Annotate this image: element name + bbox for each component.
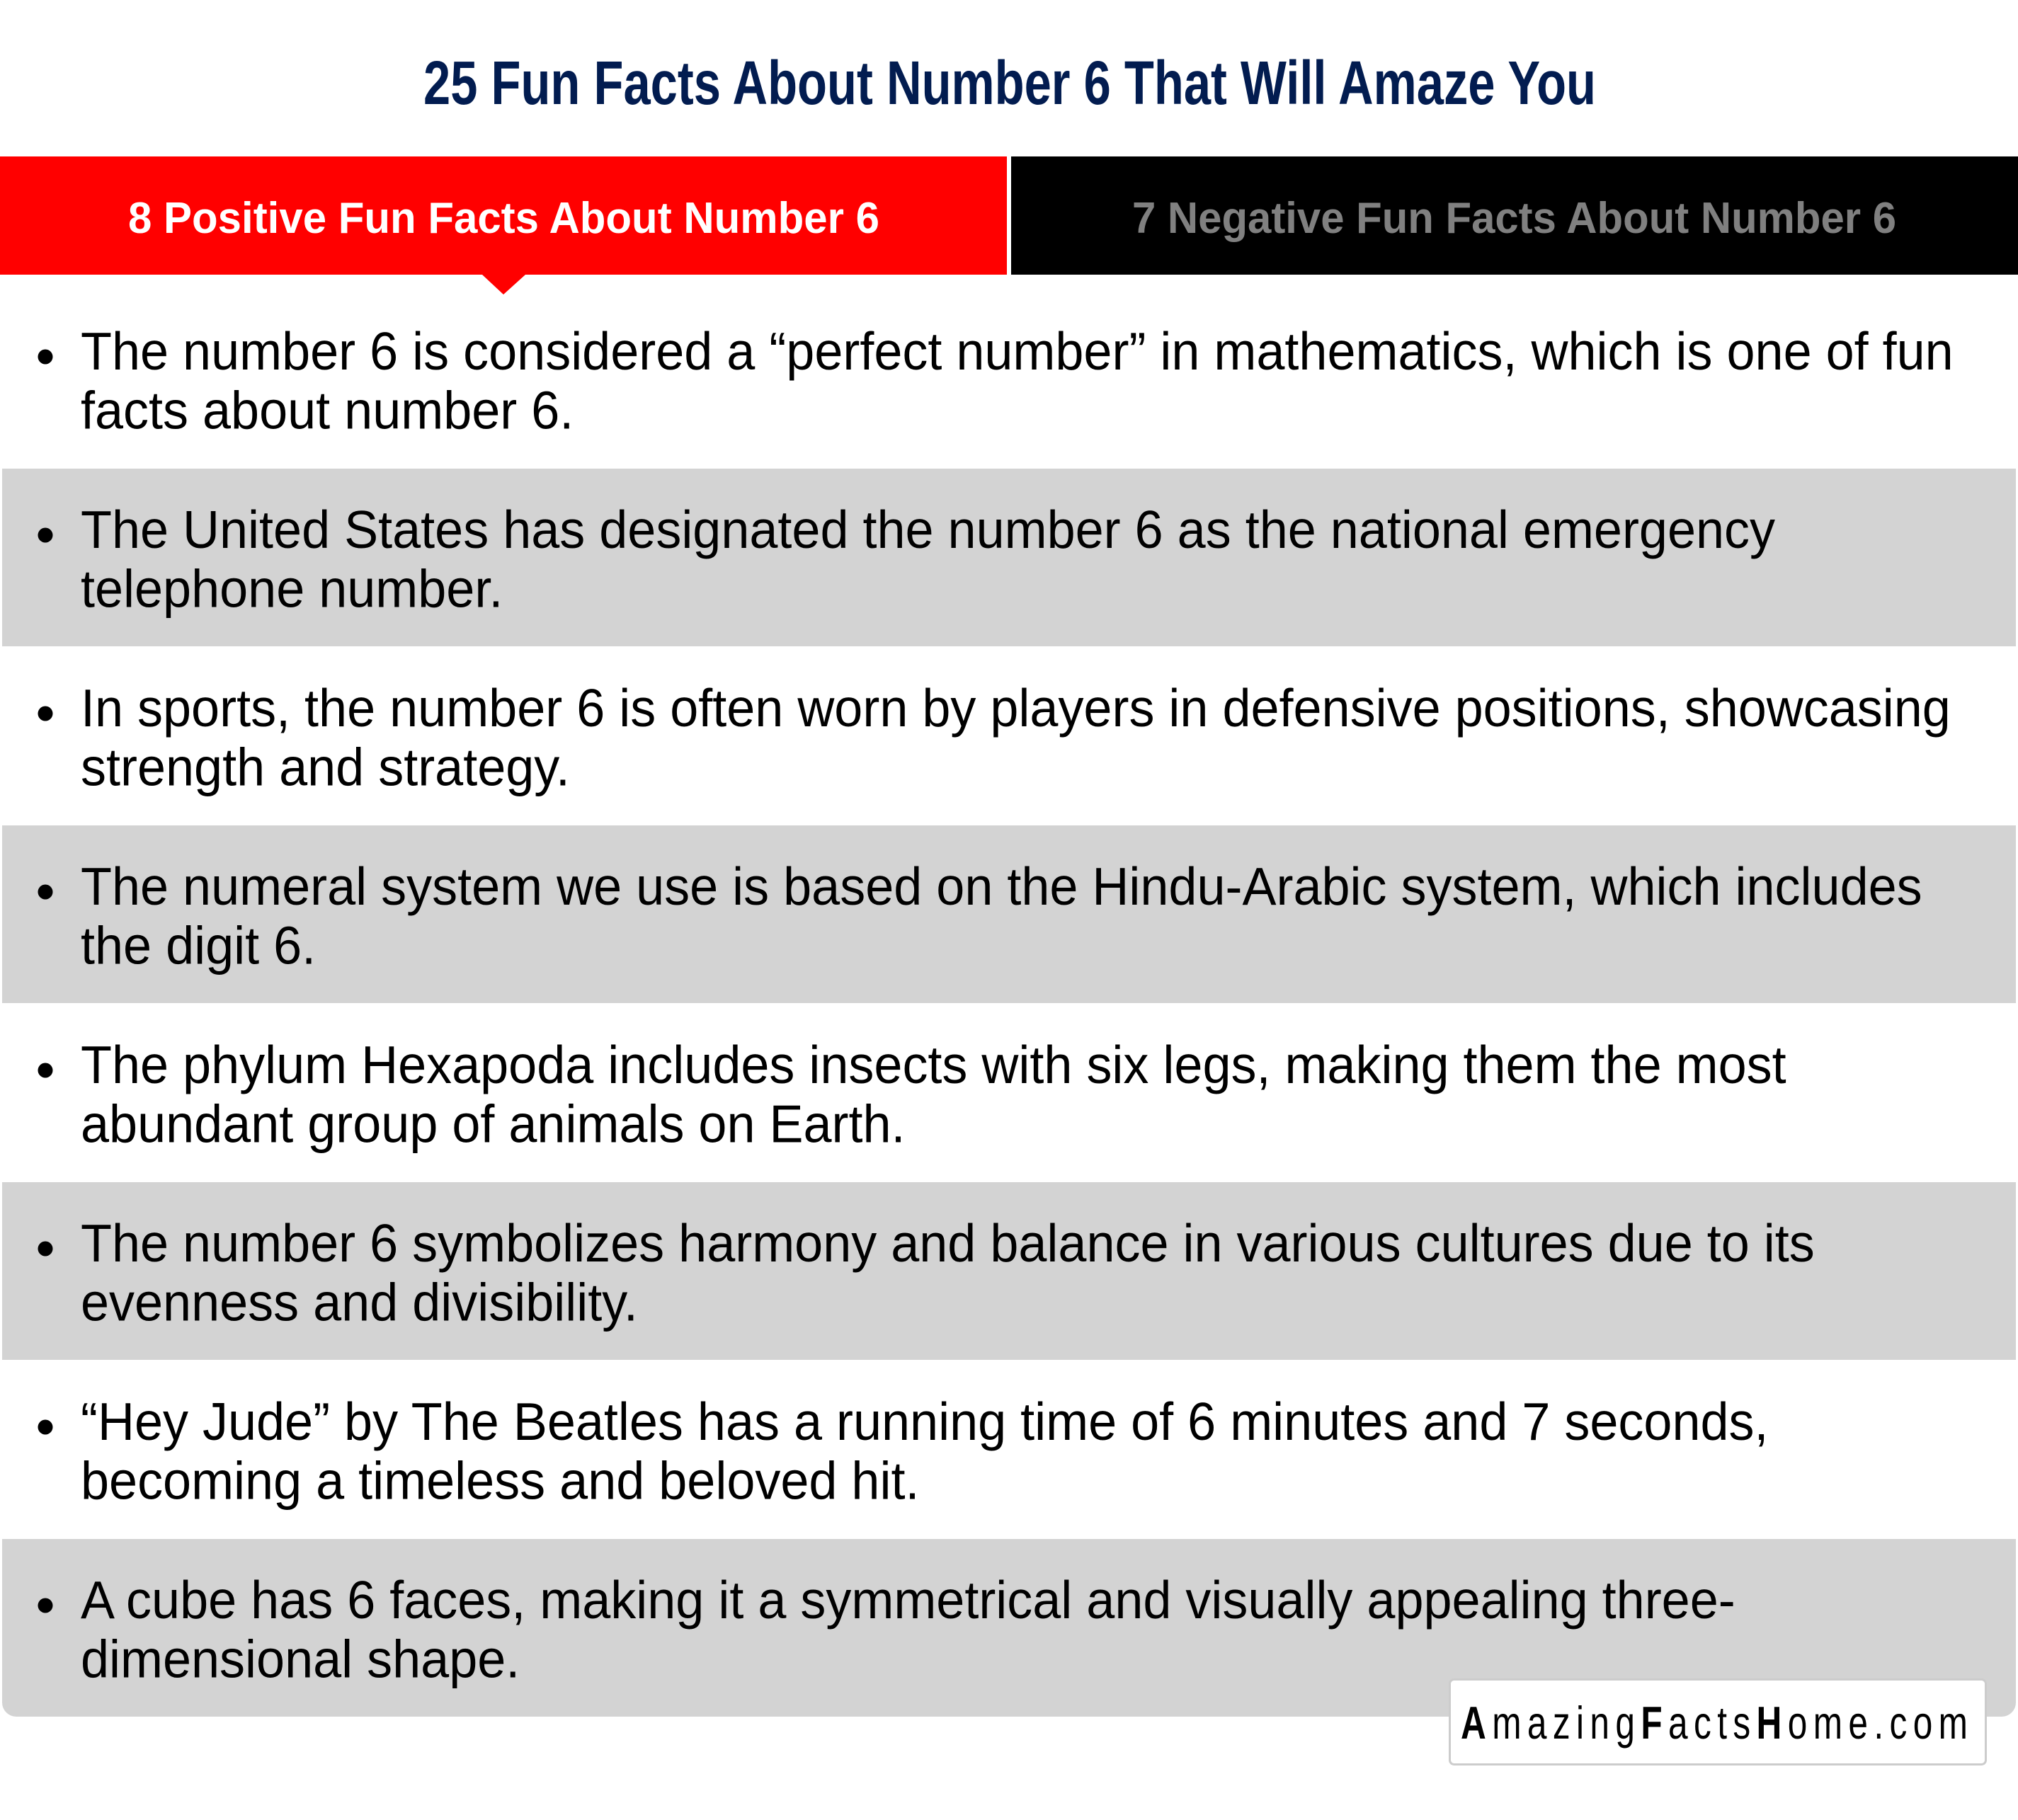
fact 1: facts about number 6.	[81, 380, 574, 440]
fact 3: In sports, the number 6 is often worn by players in defensive positions, showcasing	[81, 678, 1951, 738]
fact 1: The number 6 is considered a “perfect number” in mathematics, which is one of fun	[81, 321, 1954, 381]
tab: negative facts (inactive): 7 Negative Fun Facts About Number 6	[1132, 194, 1896, 243]
fact 7	[38, 1392, 1769, 1511]
fact 4: The numeral system we use is based on the Hindu-Arabic system, which includes	[81, 857, 1922, 916]
fact 5: The phylum Hexapoda includes insects with six legs, making them the most	[81, 1035, 1786, 1094]
title: 25 Fun Facts About Number 6 That Will Amaze You	[423, 49, 1596, 118]
fact 3	[38, 678, 1951, 797]
fact 6: evenness and divisibility.	[81, 1272, 638, 1332]
tab: positive facts (active): 8 Positive Fun Facts About Number 6	[128, 194, 879, 243]
tab: positive facts (active)	[0, 156, 1007, 294]
fact 4: the digit 6.	[81, 915, 316, 975]
fact 7: “Hey Jude” by The Beatles has a running time of 6 minutes and 7 seconds,	[81, 1392, 1769, 1451]
fact 6: The number 6 symbolizes harmony and balance in various cultures due to its	[81, 1213, 1815, 1273]
watermark badge: AmazingFactsHome.com	[1461, 1698, 1968, 1749]
fact 8: dimensional shape.	[81, 1629, 520, 1689]
fact 8	[2, 1539, 2016, 1717]
fact 3: strength and strategy.	[81, 737, 570, 797]
fact 7: becoming a timeless and beloved hit.	[81, 1450, 919, 1511]
watermark badge	[1450, 1679, 1985, 1764]
fact 5	[38, 1035, 1786, 1154]
fact 2: telephone number.	[81, 559, 503, 619]
fact 1	[38, 321, 1954, 440]
fact 4	[2, 825, 2016, 1003]
fact 5: abundant group of animals on Earth.	[81, 1094, 906, 1154]
fact 2: The United States has designated the number 6 as the national emergency	[81, 500, 1775, 559]
fact 8: A cube has 6 faces, making it a symmetrical and visually appealing three-	[81, 1570, 1735, 1630]
fact 6	[2, 1182, 2016, 1360]
tab: negative facts (inactive)	[1011, 156, 2018, 275]
fact 2	[2, 469, 2016, 646]
